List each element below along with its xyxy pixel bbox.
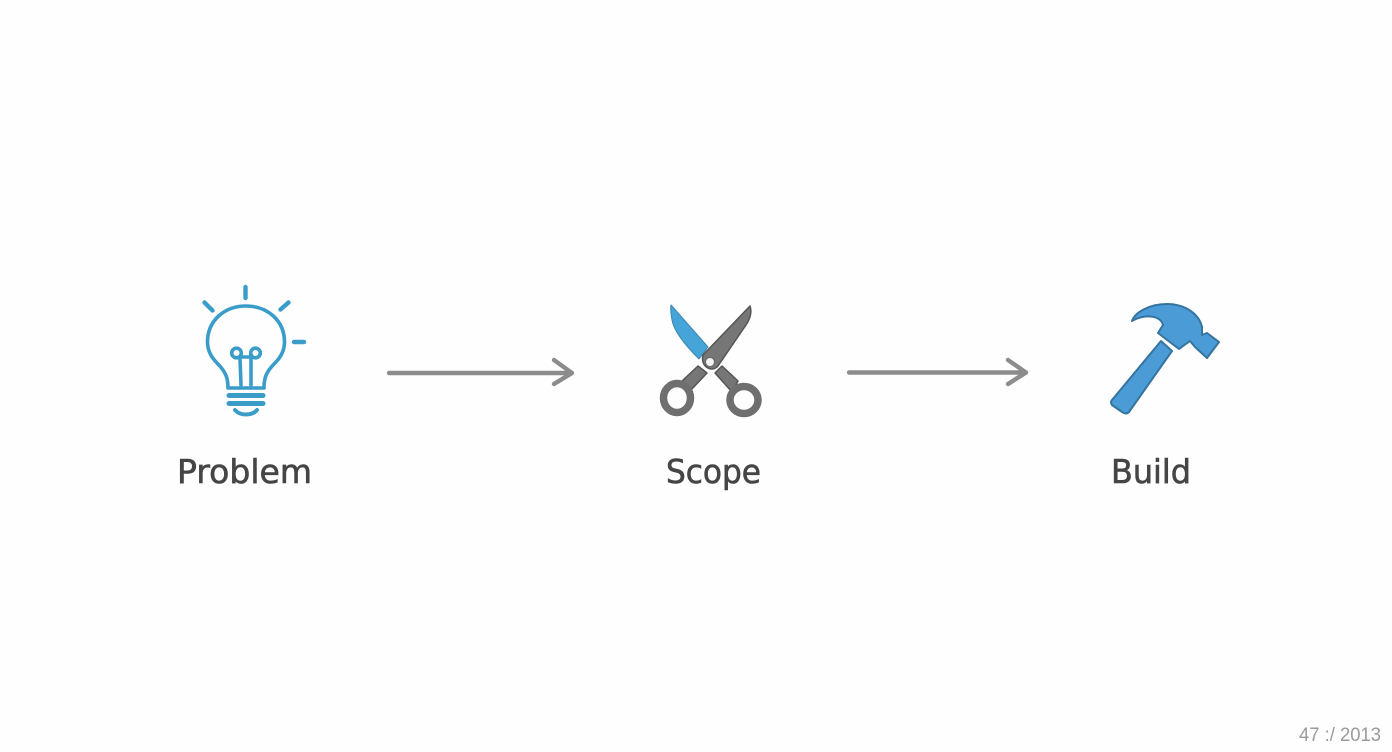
arrow: problem to scope [389, 360, 572, 384]
icon: light bulb [204, 287, 304, 414]
step: scope [664, 305, 761, 491]
arrow: scope to build [849, 360, 1026, 384]
footnote: 47 :/ 2013 [1299, 724, 1381, 746]
label: problem: Problem [177, 453, 312, 491]
step: problem [177, 287, 312, 491]
icon: hammer [1111, 304, 1219, 414]
label: scope: Scope [666, 453, 761, 491]
label: build: Build [1111, 453, 1191, 491]
icon: scissors [664, 305, 758, 414]
step: build [1111, 304, 1219, 491]
